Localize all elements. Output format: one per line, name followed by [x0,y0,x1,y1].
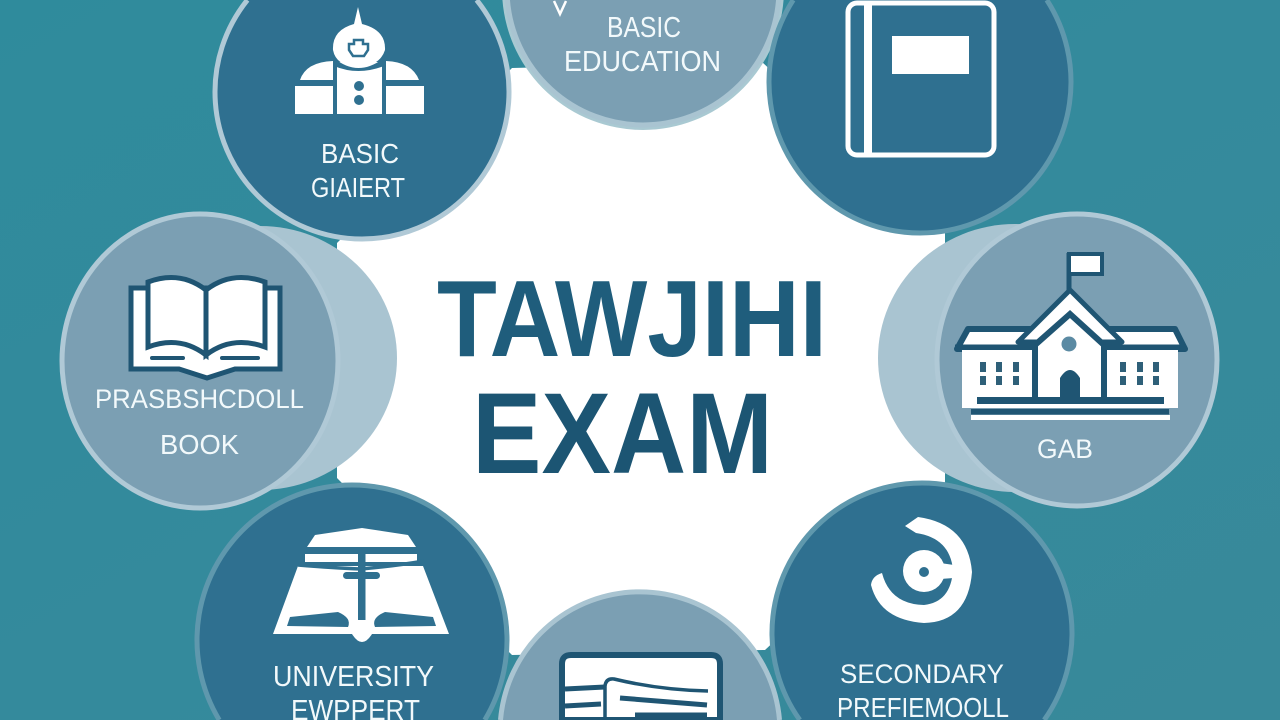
panel: basic giaiert [215,0,509,239]
title [437,258,827,498]
panel: gab school [937,214,1217,506]
title line: tawjihi: TAWJIHI [437,258,827,380]
panel: preschool book [62,214,338,508]
icon: helmet figure [295,7,424,114]
title line: exam: EXAM [472,370,773,498]
icon: open book [131,278,280,378]
icon: university book [273,528,449,642]
label: book: BOOK [160,429,239,460]
panel: university [197,485,507,720]
label: university: UNIVERSITY [273,661,434,693]
label: basic: BASIC [321,138,399,169]
label: prasbshcdoll: PRASBSHCDOLL [95,384,304,414]
central white hub [337,62,945,655]
label: education: EDUCATION [564,46,721,78]
label: basic: BASIC [607,12,681,44]
pale connector: top [502,0,784,130]
pale connector: right [878,224,1152,492]
icon: document [562,655,720,720]
icon: partial check [554,1,566,14]
icon: school building [955,253,1186,420]
pale connector: left [123,226,397,490]
icon: circular target [871,517,972,623]
icon: closed book [848,3,994,157]
panel: basic education [507,0,779,125]
label: giaiert: GIAIERT [311,172,405,203]
panel: bottom book [500,592,780,720]
panel: secondary [772,483,1072,720]
label: gab: GAB [1037,434,1093,464]
label: secondary: SECONDARY [840,659,1004,689]
panel: book [769,0,1071,233]
